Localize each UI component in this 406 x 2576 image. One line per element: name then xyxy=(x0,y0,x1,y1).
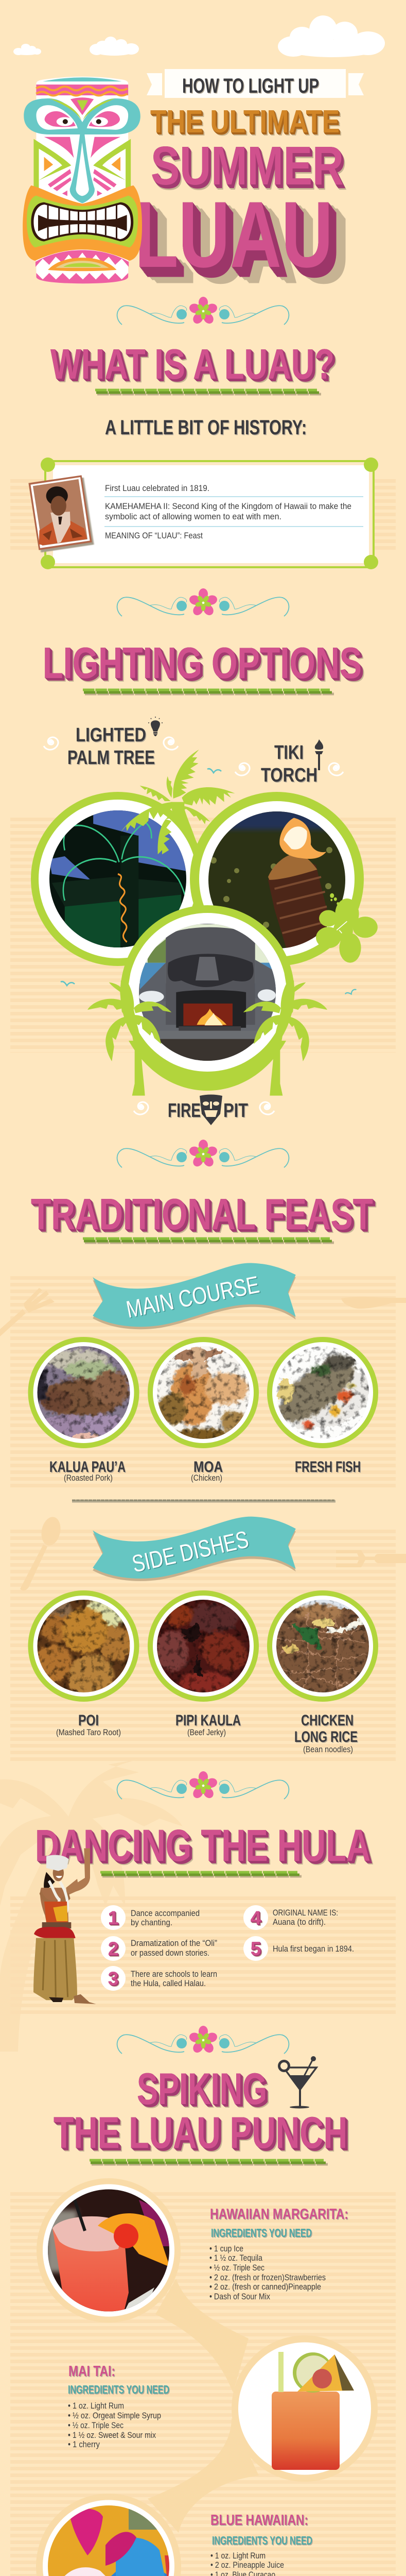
label: fire pit xyxy=(168,1094,248,1125)
label: lighted palm tree: PALM TREE xyxy=(67,747,155,769)
label: moa: (Chicken) xyxy=(191,1473,222,1483)
text: first luau: First Luau celebrated in 1819. xyxy=(105,483,209,493)
label: tiki torch: TIKI xyxy=(274,742,304,764)
title: Summer Luau xyxy=(135,69,364,287)
background palm tree silhouette xyxy=(0,1757,183,2052)
recipe: blue hawaiian xyxy=(210,2512,312,2576)
label: kalua pau'a xyxy=(49,1459,126,1483)
background stripes xyxy=(10,2192,396,2576)
clouds xyxy=(13,15,385,57)
food: chicken long rice photo xyxy=(267,1590,378,1702)
heading underline xyxy=(83,1239,334,1243)
background stripes xyxy=(10,1896,396,2015)
fact 4: Auana (to drift). xyxy=(273,1917,326,1927)
label: poi: (Mashed Taro Root) xyxy=(56,1727,121,1737)
palm tree silhouette xyxy=(121,750,235,854)
text: meaning: MEANING OF “LUAU”: Feast xyxy=(105,531,203,540)
background stripes xyxy=(10,479,396,551)
food: pipi kaula photo xyxy=(148,1590,259,1702)
heading underline xyxy=(90,2160,328,2164)
swirl xyxy=(44,737,58,750)
recipe: hawaiian margarita xyxy=(209,2206,348,2301)
swirl xyxy=(164,737,178,750)
recipe: mai tai: MAI TAI: xyxy=(68,2363,115,2380)
title line: summer: SUMMER xyxy=(151,135,344,196)
recipe: hawaiian margarita: • 1 ½ oz. Tequila xyxy=(209,2253,262,2263)
title line: the ultimate: THE ULTIMATE xyxy=(150,104,340,140)
recipe: hawaiian margarita: INGREDIENTS YOU NEED xyxy=(211,2226,312,2240)
heading underline xyxy=(100,1872,302,1876)
fact 3: There are schools to learn xyxy=(131,1969,217,1979)
label: pipi kaula xyxy=(175,1712,241,1737)
icon: cocktail xyxy=(278,2056,316,2108)
label: fire pit: PIT xyxy=(223,1100,248,1122)
recipe: mai tai: • 1 ½ oz. Sweet & Sour mix xyxy=(68,2430,156,2440)
label: chicken long rice xyxy=(294,1712,358,1754)
background stripes xyxy=(10,1530,396,1764)
recipe: blue hawaiian: INGREDIENTS YOU NEED xyxy=(212,2534,312,2547)
connector shapes between drink circles xyxy=(36,2178,378,2576)
heading underline xyxy=(95,390,321,394)
palm tree left, front of fire pit xyxy=(87,974,171,1096)
heading underline xyxy=(83,690,334,694)
banner: side dishes xyxy=(93,1517,296,1581)
food: fresh fish photo xyxy=(267,1337,380,1448)
circle: tiki torch photo xyxy=(190,792,364,966)
fact 4: ORIGINAL NAME IS: xyxy=(273,1908,338,1918)
label: pipi kaula: PIPI KAULA xyxy=(175,1712,241,1729)
swirl xyxy=(134,1102,148,1114)
icon: green hibiscus xyxy=(316,893,378,963)
drink: mai tai photo xyxy=(238,2342,371,2475)
food: poi photo xyxy=(28,1590,139,1702)
banner: main course: MAIN COURSE xyxy=(124,1271,261,1323)
text: kamehameha: symbolic act of allowing women to eat with men. xyxy=(105,512,281,521)
label: tiki torch: TORCH xyxy=(261,765,317,786)
label: fire pit: FIRE xyxy=(168,1100,201,1122)
fact 2: 2 xyxy=(108,1938,118,1959)
background stripes xyxy=(10,1276,396,1490)
recipe: hawaiian margarita: • 2 oz. (fresh or frozen)Strawberries xyxy=(209,2273,326,2282)
title line: luau: LUAU xyxy=(135,182,333,287)
label: chicken long rice: LONG RICE xyxy=(294,1728,358,1745)
icon: fork background xyxy=(336,1550,406,1567)
label: kalua pau'a: KALUA PAU’A xyxy=(49,1459,126,1476)
recipe: mai tai xyxy=(68,2363,169,2449)
label: poi xyxy=(56,1712,121,1737)
icon: knife background xyxy=(341,1297,406,1309)
label: moa: MOA xyxy=(193,1459,223,1476)
panel: history xyxy=(28,457,378,569)
title ribbon xyxy=(147,69,364,98)
subheading: a little bit of history: A LITTLE BIT OF HISTORY: xyxy=(105,416,307,439)
recipe: mai tai: • ½ oz. Triple Sec xyxy=(68,2420,123,2430)
recipe: mai tai: • 1 oz. Light Rum xyxy=(68,2401,124,2411)
icon: spoon background xyxy=(20,1515,63,1591)
fact 4: 4 xyxy=(251,1907,261,1928)
fact 3: 3 xyxy=(108,1968,118,1989)
background stripes xyxy=(10,818,396,1053)
heading: spiking the luau punch: SPIKING xyxy=(137,2064,267,2114)
fact 5 xyxy=(243,1936,354,1961)
fact 5: 5 xyxy=(251,1938,261,1959)
label: kalua pau'a: (Roasted Pork) xyxy=(64,1473,113,1483)
divider: flower xyxy=(117,588,289,617)
drink: blue hawaiian photo xyxy=(43,2500,175,2576)
recipe: mai tai: • 1 cherry xyxy=(68,2439,100,2449)
recipe: hawaiian margarita: • Dash of Sour Mix xyxy=(209,2292,270,2301)
divider: flower xyxy=(117,2026,289,2055)
banner: side dishes: SIDE DISHES xyxy=(130,1526,251,1578)
title ribbon: HOW TO LIGHT UP xyxy=(182,75,319,97)
icon: fork background xyxy=(0,1288,55,1336)
recipe: hawaiian margarita: • ½ oz. Triple Sec xyxy=(209,2263,264,2273)
label: chicken long rice: (Bean noodles) xyxy=(303,1744,353,1754)
icon: tiki face xyxy=(200,1094,222,1125)
bird xyxy=(207,769,221,773)
fact 1 xyxy=(101,1905,200,1930)
icon: light bulb xyxy=(148,717,163,736)
bird xyxy=(345,988,357,997)
label: poi: POI xyxy=(78,1712,99,1729)
recipe: hawaiian margarita: • 2 oz. (fresh or canned)Pineapple xyxy=(209,2282,321,2292)
divider: flower xyxy=(117,297,289,326)
label: fresh fish: FRESH FISH xyxy=(295,1459,361,1476)
fact 5: Hula first began in 1894. xyxy=(273,1944,354,1954)
bird xyxy=(61,981,75,986)
swirl xyxy=(329,763,343,775)
recipe: blue hawaiian: BLUE HAWAIIAN: xyxy=(210,2512,308,2529)
swirl xyxy=(235,763,250,775)
recipe: blue hawaiian: • 1 oz. Light Rum xyxy=(210,2551,266,2561)
icon: torch xyxy=(315,739,323,770)
recipe: mai tai: INGREDIENTS YOU NEED xyxy=(68,2383,169,2396)
portrait of Kamehameha II xyxy=(28,475,94,552)
label: lighted palm tree xyxy=(67,717,163,769)
palm tree right, front of fire pit xyxy=(243,974,327,1096)
divider: flower xyxy=(117,1771,289,1800)
food: kalua pau'a photo xyxy=(28,1337,139,1448)
label: pipi kaula: (Beef Jerky) xyxy=(187,1727,226,1737)
swirl xyxy=(260,1102,274,1114)
food: moa photo xyxy=(148,1337,259,1448)
recipe: hawaiian margarita: • 1 cup Ice xyxy=(209,2244,243,2253)
text: kamehameha xyxy=(105,501,351,521)
circle: lighted palm tree photo xyxy=(31,792,205,966)
fact 1: 1 xyxy=(108,1907,118,1928)
fact 2: or passed down stories. xyxy=(131,1948,209,1958)
recipe: mai tai: • ½ oz. Orgeat Simple Syrup xyxy=(68,2411,161,2420)
drink: hawaiian margarita photo xyxy=(43,2184,174,2316)
tiki mask illustration xyxy=(23,77,142,283)
hula dancer xyxy=(33,1849,96,2004)
label: chicken long rice: CHICKEN xyxy=(301,1712,354,1729)
label: lighted palm tree: LIGHTED xyxy=(76,724,146,746)
circle: fire pit photo xyxy=(120,905,294,1091)
fact 3: the Hula, called Halau. xyxy=(131,1978,206,1988)
hula facts xyxy=(101,1905,354,1991)
text: kamehameha: KAMEHAMEHA II: Second King of the Kingdom of Hawaii to make the xyxy=(105,501,351,511)
fact 3 xyxy=(101,1966,217,1991)
fact 4 xyxy=(243,1905,338,1930)
heading: spiking the luau punch xyxy=(54,2064,347,2158)
fact 1: Dance accompanied xyxy=(131,1908,200,1918)
recipe: hawaiian margarita: HAWAIIAN MARGARITA: xyxy=(210,2206,348,2223)
fact 2: Dramatization of the “Oli” xyxy=(131,1938,217,1948)
label: moa xyxy=(191,1459,223,1483)
divider: flower xyxy=(117,1140,289,1168)
recipe: blue hawaiian: • 2 oz. Pineapple Juice xyxy=(210,2560,284,2570)
fact 2 xyxy=(101,1936,217,1961)
fact 1: by chanting. xyxy=(131,1918,172,1927)
label: tiki torch xyxy=(261,739,323,786)
rope divider xyxy=(72,1500,336,1501)
